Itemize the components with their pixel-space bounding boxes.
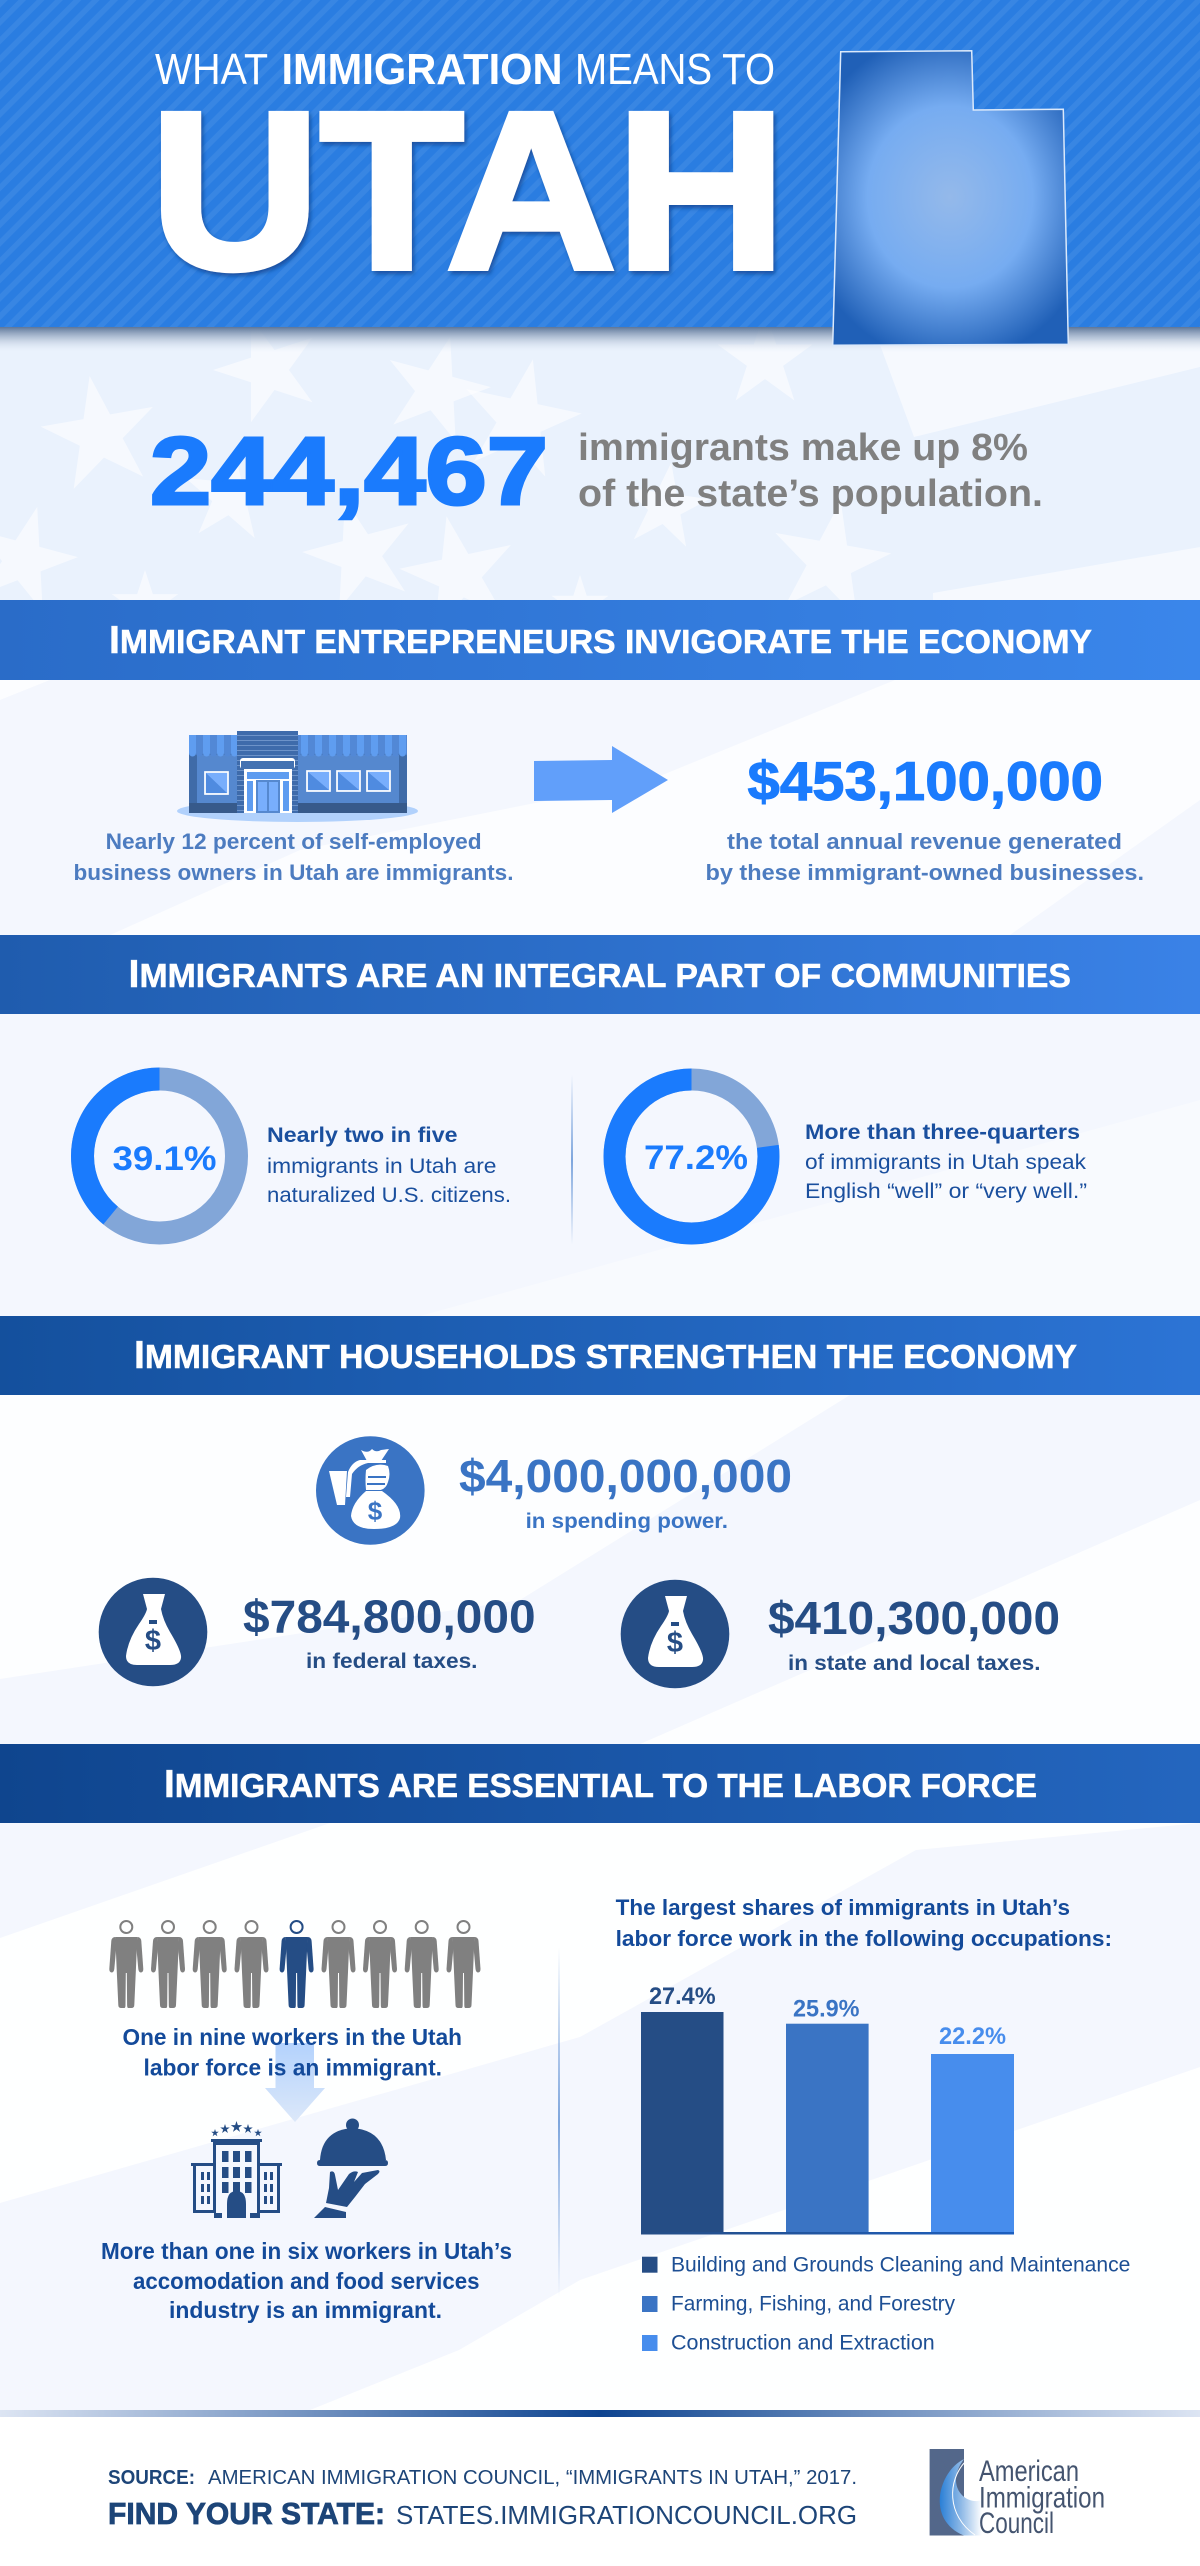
chart legend: Building and Grounds Cleaning and Maintenance [671,2254,1130,2277]
statistic: annual revenue: by these immigrant-owned businesses. [706,860,1144,885]
text: naturalized citizens: immigrants in Utah are [267,1155,496,1178]
statistic: annual revenue: $453,100,000 [748,750,1103,812]
statistic: federal taxes [243,1590,536,1673]
section heading: households [0,1316,1200,1395]
section heading: entrepreneurs: IMMIGRANT ENTREPRENEURS INVIGORATE THE ECONOMY [109,619,1092,662]
statistic: spending power: in spending power. [526,1510,728,1533]
statistic: spending power [459,1450,792,1533]
logo: American Immigration Council: American [979,2455,1079,2488]
text: one in nine workers [122,2024,462,2080]
bar chart: occupations: 25.9% [793,1996,860,2022]
text: naturalized citizens: naturalized U.S. citizens. [267,1184,511,1207]
source line: FIND YOUR STATE: [108,2496,385,2531]
text: accommodation and food services: industry is an immigrant. [169,2297,442,2323]
donut chart: 77.2%: 77.2% [644,1139,748,1177]
title: IMMIGRATION [282,45,562,94]
title: WHAT [155,45,268,94]
source line: STATES.IMMIGRATIONCOUNCIL.ORG [396,2500,857,2530]
headline statistic: immigrants make up 8% [578,427,1028,469]
statistic: state and local taxes: in state and local taxes. [788,1652,1040,1675]
text: English proficiency: More than three-quarters [805,1121,1080,1144]
statistic: federal taxes: in federal taxes. [306,1650,478,1673]
header banner [0,0,1200,327]
chart title: The largest shares of immigrants in Utah’s [616,1895,1070,1920]
statistic: annual revenue [706,750,1144,885]
section heading: communities [0,935,1200,1014]
icon: hand holding money bag [316,1436,425,1545]
bar chart: occupations: 27.4% [649,1983,716,2010]
logo: American Immigration Council: Immigration [979,2482,1105,2514]
icon: hand holding money bag: $ [368,1496,383,1526]
icon: Utah state map [833,51,1068,345]
headline statistic: of the state’s population. [578,473,1043,515]
logo: American Immigration Council [930,2449,1105,2540]
statistic: state and local taxes [768,1592,1060,1675]
pictogram: one in nine workers [109,1921,481,2008]
statistic: annual revenue: the total annual revenue generated [727,829,1122,854]
icon: serving cloche and hand [314,2118,388,2218]
source line [108,2467,857,2531]
arrow: right [534,746,668,813]
title: MEANS TO [575,45,775,94]
chart legend: Construction and Extraction [671,2331,935,2354]
donut chart: 39.1% [82,1079,236,1233]
title: UTAH [150,66,786,316]
headline statistic: 244,467 [150,418,548,525]
source line: AMERICAN IMMIGRATION COUNCIL, “IMMIGRANTS IN UTAH,” 2017. [208,2467,857,2489]
section heading: households: IMMIGRANT HOUSEHOLDS STRENGTHEN THE ECONOMY [134,1334,1077,1377]
icon: money bag federal: $ [145,1625,161,1657]
text: English proficiency: of immigrants in Utah speak [805,1151,1087,1174]
text: self-employed share: business owners in Utah are immigrants. [74,860,514,885]
statistic: spending power: $4,000,000,000 [459,1450,792,1502]
text: naturalized citizens: Nearly two in five [267,1124,458,1147]
text: accommodation and food services [101,2238,512,2323]
icon: money bag state and local: $ [667,1627,683,1659]
donut chart: 39.1%: 39.1% [112,1140,216,1178]
icon: money bag federal [99,1578,207,1686]
chart legend [642,2254,1130,2354]
text: accommodation and food services: More than one in six workers in Utah’s [101,2238,512,2264]
bar chart: occupations: 22.2% [939,2023,1006,2050]
text: self-employed share [74,829,514,885]
text: one in nine workers: labor force is an immigrant. [144,2054,442,2080]
logo: American Immigration Council: Council [979,2507,1054,2540]
icon: hotel [191,2121,282,2218]
section heading: labor force: IMMIGRANTS ARE ESSENTIAL TO THE LABOR FORCE [164,1763,1037,1806]
text: self-employed share: Nearly 12 percent of self-employed [106,829,482,854]
section heading: labor force [0,1744,1200,1823]
statistic: federal taxes: $784,800,000 [243,1590,536,1642]
text: accommodation and food services: accomodation and food services [133,2268,480,2294]
chart title: labor force work in the following occupations: [616,1926,1112,1951]
text: naturalized citizens [267,1124,511,1207]
bar chart: occupations [641,1983,1014,2234]
section heading: entrepreneurs [0,600,1200,680]
section heading: communities: IMMIGRANTS ARE AN INTEGRAL PART OF COMMUNITIES [128,953,1071,996]
source line: SOURCE: [108,2467,195,2489]
donut chart: 77.2% [614,1080,768,1234]
text: English proficiency: English “well” or “very well.” [805,1180,1087,1203]
headline statistic [150,418,1043,525]
arrow: down [265,2043,325,2122]
icon: storefront [177,731,418,822]
icon: money bag state and local [621,1580,729,1688]
chart legend: Farming, Fishing, and Forestry [671,2293,955,2316]
statistic: state and local taxes: $410,300,000 [768,1592,1060,1644]
chart title [616,1895,1112,1951]
text: one in nine workers: One in nine workers in the Utah [122,2024,462,2050]
text: English proficiency [805,1121,1087,1203]
